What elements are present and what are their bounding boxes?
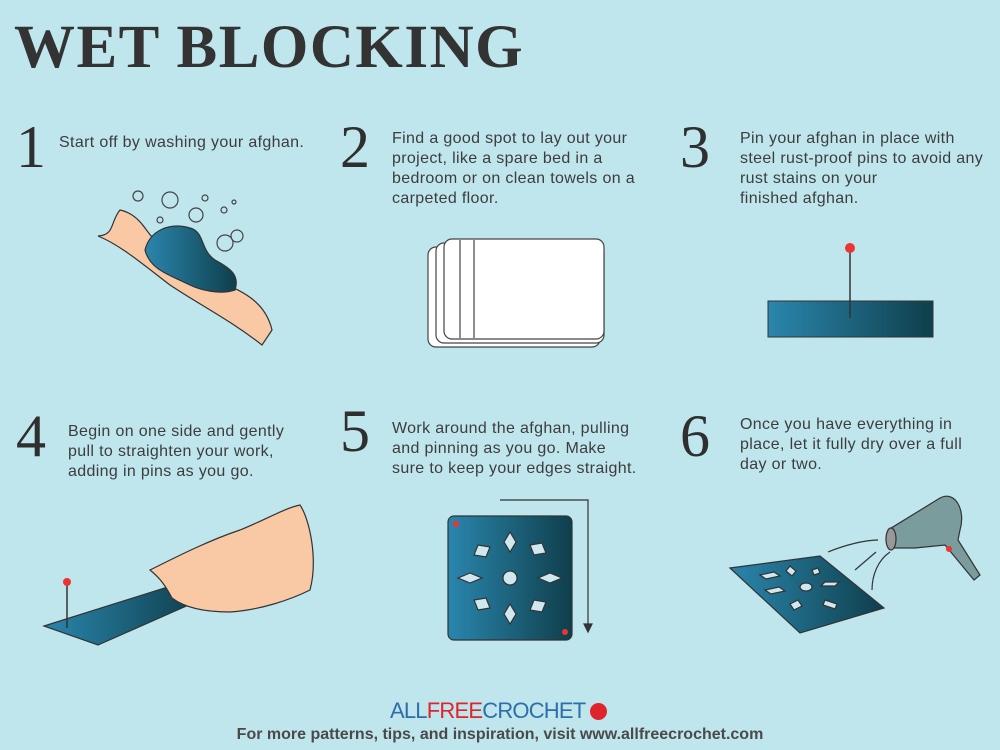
step 4 number: 4 — [16, 403, 46, 469]
step 5 text: Work around the afghan, pulling — [392, 420, 629, 437]
step 6 number: 6 — [680, 403, 710, 469]
icon: pinned square afghan with arrow — [448, 500, 592, 640]
step 1 number: 1 — [16, 114, 46, 180]
step 3 text — [740, 130, 983, 207]
step 2 text: bedroom or on clean towels on a — [392, 170, 635, 187]
step 5 text: and pinning as you go. Make — [392, 440, 606, 457]
icon: towels — [428, 239, 604, 347]
icon: hand pulling — [44, 505, 313, 645]
step 3 number: 3 — [680, 114, 710, 180]
step 6 text: place, let it fully dry over a full — [740, 436, 962, 453]
step 2 text: project, like a spare bed in a — [392, 150, 603, 167]
footer: For more patterns, tips, and inspiration, visit www.allfreecrochet.com — [237, 726, 763, 743]
step 2 text — [392, 130, 635, 207]
title: WET BLOCKING — [14, 14, 524, 81]
step 2 number: 2 — [340, 114, 370, 180]
step 5 number: 5 — [340, 398, 370, 464]
step 4 text — [68, 423, 284, 480]
step 3 text: rust stains on your — [740, 170, 877, 187]
step 2 text: carpeted floor. — [392, 190, 499, 207]
icon: hand with soap bubbles — [98, 191, 272, 345]
icon: hair dryer over afghan — [730, 496, 980, 633]
step 2 text: Find a good spot to lay out your — [392, 130, 627, 147]
step 5 text: sure to keep your edges straight. — [392, 460, 637, 477]
step 6 text: Once you have everything in — [740, 416, 952, 433]
step 4 text: pull to straighten your work, — [68, 443, 274, 460]
step 3 text: finished afghan. — [740, 190, 859, 207]
step 4 text: Begin on one side and gently — [68, 423, 284, 440]
step 6 text — [740, 416, 962, 473]
step 4 text: adding in pins as you go. — [68, 463, 254, 480]
step 3 text: steel rust-proof pins to avoid any — [740, 150, 983, 167]
step 3 text: Pin your afghan in place with — [740, 130, 955, 147]
step 1 text: Start off by washing your afghan. — [59, 134, 304, 151]
step 6 text: day or two. — [740, 456, 822, 473]
icon: pinned afghan — [768, 243, 933, 337]
logo: ALLFREECROCHET — [390, 698, 585, 723]
step 5 text — [392, 420, 637, 477]
